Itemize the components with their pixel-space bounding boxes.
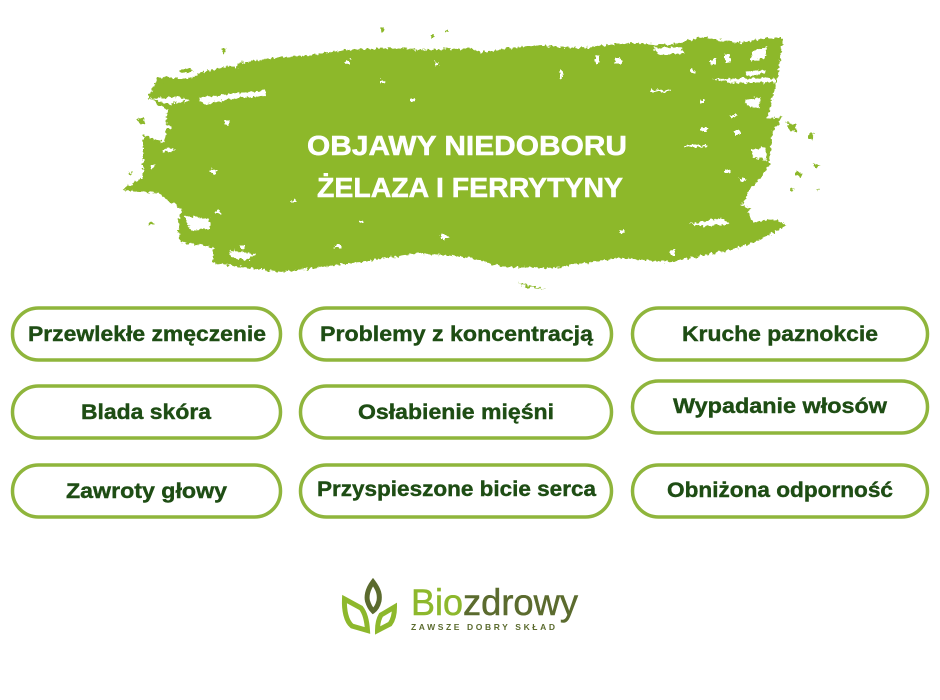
pill: Przewlekłe zmęczenie [12, 308, 280, 360]
pill: Zawroty głowy [12, 465, 280, 517]
pill: Problemy z koncentracją [300, 308, 612, 360]
pill: Zawroty głowy: Zawroty głowy [66, 480, 227, 503]
symptom pills [12, 308, 928, 517]
pill: Kruche paznokcie [632, 308, 928, 360]
pill: Wypadanie włosów: Wypadanie włosów [673, 395, 888, 418]
pill: Obniżona odporność: Obniżona odporność [667, 479, 893, 502]
pill: Kruche paznokcie: Kruche paznokcie [682, 323, 878, 346]
pill: Blada skóra: Blada skóra [81, 401, 211, 424]
pill: Obniżona odporność [632, 465, 928, 517]
pill: Wypadanie włosów [632, 381, 928, 433]
green brush stroke background [122, 28, 820, 289]
wordmark [411, 582, 578, 623]
logo: Biozdrowy [344, 582, 578, 632]
pill: Osłabienie mięśni: Osłabienie mięśni [358, 401, 554, 424]
pill: Przyspieszone bicie serca: Przyspieszone bicie serca [317, 478, 596, 501]
title [307, 130, 627, 203]
icon: leaves [344, 582, 394, 630]
tagline: ZAWSZE DOBRY SKŁAD [411, 622, 555, 632]
wordmark: Bio [411, 582, 463, 623]
pill: Przewlekłe zmęczenie: Przewlekłe zmęczenie [28, 323, 266, 346]
pill: Osłabienie mięśni [300, 386, 612, 438]
wordmark: zdrowy [463, 582, 578, 623]
pill: Przyspieszone bicie serca [300, 465, 612, 517]
pill: Problemy z koncentracją: Problemy z koncentracją [320, 323, 593, 346]
title: ŻELAZA I FERRYTYNY [317, 172, 623, 203]
title: OBJAWY NIEDOBORU [307, 130, 627, 161]
pill: Blada skóra [12, 386, 280, 438]
